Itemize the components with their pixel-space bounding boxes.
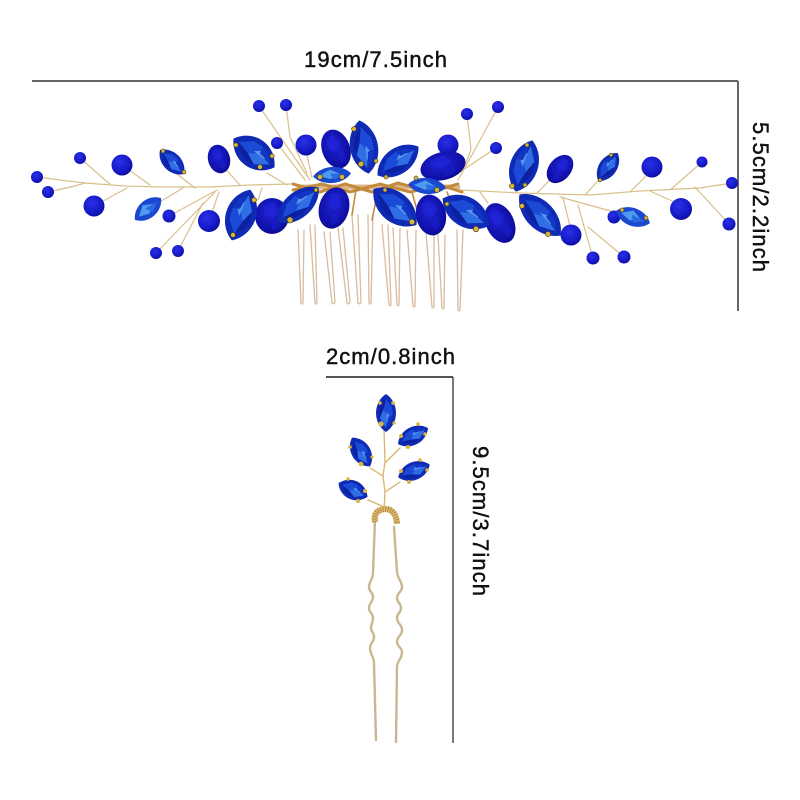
hairpin branches xyxy=(368,430,400,510)
hairpin gems xyxy=(334,394,433,505)
comb crystal drops xyxy=(205,125,579,248)
comb teeth xyxy=(298,215,463,311)
comb wire tangle xyxy=(293,183,462,220)
dimension: comb height label: 5.5cm/2.2inch xyxy=(748,122,773,272)
comb beads xyxy=(31,99,738,264)
hairpin legs xyxy=(369,520,402,742)
dimension: hairpin width line xyxy=(326,376,453,378)
dimension: comb width line xyxy=(32,80,738,82)
dimension: comb height line xyxy=(737,81,739,311)
dimension: hairpin height line xyxy=(452,377,454,743)
comb wire branches xyxy=(37,105,732,258)
hairpin gold prongs xyxy=(346,401,429,503)
dimension: hairpin width label: 2cm/0.8inch xyxy=(326,344,455,369)
dimension: comb width label: 19cm/7.5inch xyxy=(304,47,447,72)
comb marquise gems xyxy=(129,118,653,245)
hairpin wire coil xyxy=(375,509,397,524)
comb gold prongs xyxy=(161,127,648,238)
dimension: hairpin height label: 9.5cm/3.7inch xyxy=(468,446,493,596)
